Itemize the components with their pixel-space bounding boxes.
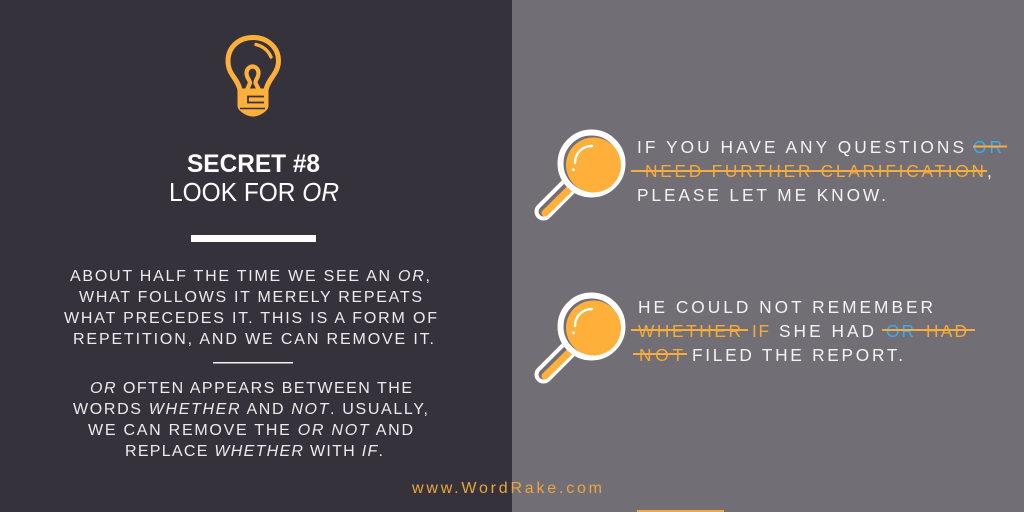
icon: magnifier one (544, 130, 626, 213)
example sentence one: IF YOU HAVE ANY QUESTIONS (637, 137, 964, 157)
text block: second paragraph: WORDS WHETHER AND NOT. USUALLY, (73, 401, 428, 418)
text block: first paragraph: REPETITION, AND WE CAN REMOVE IT. (73, 331, 434, 348)
example sentence two: IF (752, 321, 769, 341)
text block: second paragraph: WE CAN REMOVE THE OR NOT AND (88, 422, 413, 439)
text block: first paragraph: ABOUT HALF THE TIME WE SEE AN OR, (70, 268, 430, 285)
example sentence two: FILED THE REPORT. (692, 345, 903, 365)
text block: second paragraph: OR OFTEN APPEARS BETWEEN THE (90, 380, 412, 397)
example sentence two: OR (886, 321, 914, 341)
panel: right grey background (512, 0, 1024, 512)
example sentence two: SHE HAD (779, 321, 874, 341)
text block: first paragraph (64, 268, 437, 348)
panel: left dark background (0, 0, 512, 512)
example sentence one: PLEASE LET ME KNOW. (637, 185, 886, 205)
example sentence one: NEED FURTHER CLARIFICATION (645, 161, 984, 181)
text block: second paragraph (73, 380, 428, 460)
text block: first paragraph: WHAT PRECEDES IT. THIS IS A FORM OF (64, 310, 437, 327)
text block: first paragraph: WHAT FOLLOWS IT MERELY REPEATS (79, 289, 422, 306)
icon: magnifier two (544, 292, 626, 376)
heading: look for or: LOOK FOR OR (169, 177, 339, 207)
example sentence one: OR (973, 137, 1002, 157)
example sentence one (631, 137, 1007, 205)
text block: second paragraph: REPLACE WHETHER WITH IF. (125, 443, 383, 460)
bottom accent line (637, 510, 724, 512)
paragraph divider (213, 362, 293, 364)
heading underline bar (191, 235, 316, 242)
example sentence two: HE COULD NOT REMEMBER (638, 297, 933, 317)
example sentence two: WHETHER (638, 321, 741, 341)
heading: secret number: SECRET #8 (187, 150, 320, 178)
icon: light bulb (228, 38, 278, 116)
example sentence two: HAD (926, 321, 967, 341)
website url: www.WordRake.com (411, 480, 602, 497)
example sentence two (631, 297, 975, 365)
example sentence one: , (987, 161, 992, 181)
example sentence two: NOT (639, 345, 683, 365)
